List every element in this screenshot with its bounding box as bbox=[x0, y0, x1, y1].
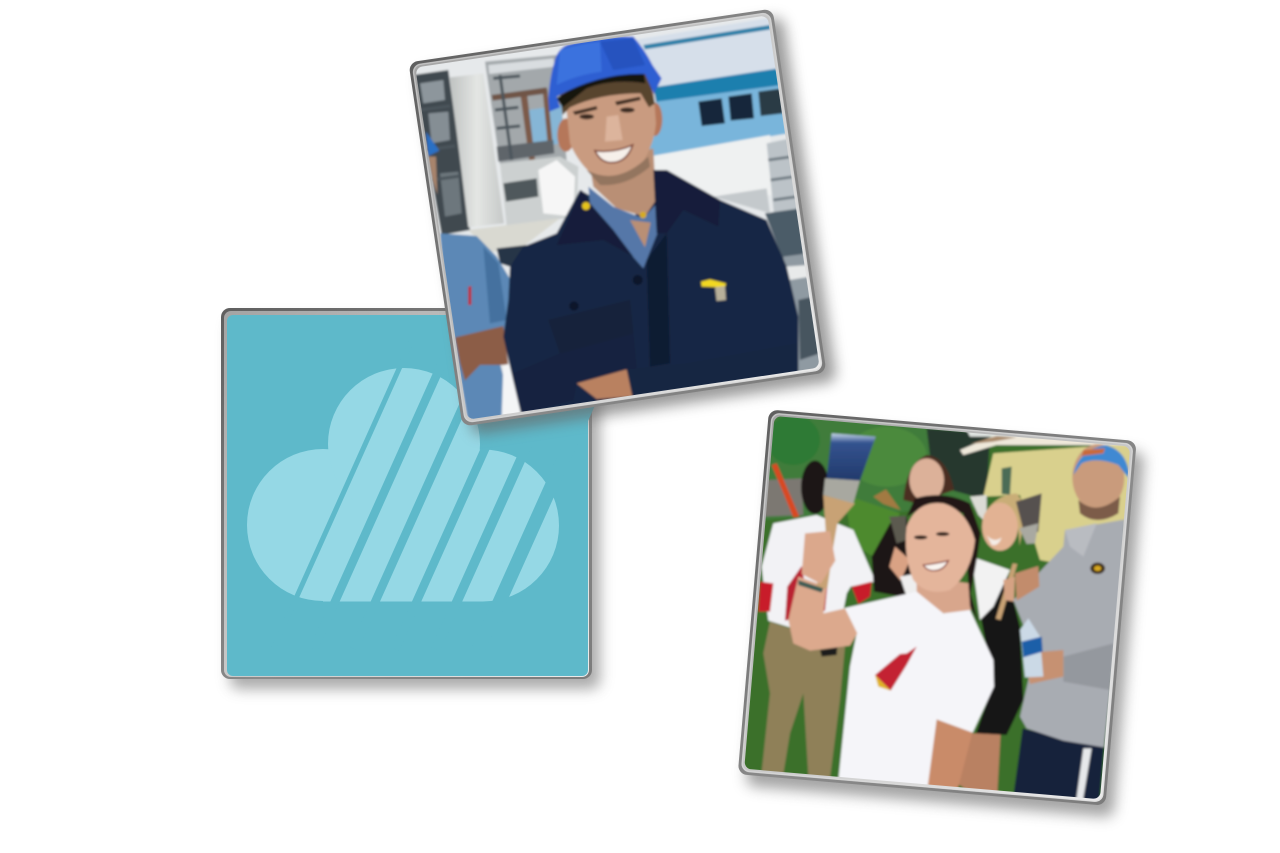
ears and head bbox=[557, 118, 575, 152]
blonde woman with brush bbox=[957, 493, 1042, 794]
foreground worker bbox=[503, 36, 798, 417]
woman behind, centre bbox=[872, 455, 954, 600]
building background bbox=[413, 17, 823, 373]
panel: worker photo card bbox=[400, 0, 840, 440]
navy jacket bbox=[503, 170, 798, 417]
yellow badge bbox=[701, 279, 726, 287]
eyes and brows bbox=[579, 114, 594, 119]
icon: striped cloud bbox=[247, 341, 616, 649]
smile bbox=[595, 145, 633, 163]
woman in front holding brush bbox=[788, 433, 994, 791]
man in grey sweater and blue cap bbox=[1013, 444, 1130, 803]
neck bbox=[590, 148, 656, 217]
black helmet band bbox=[557, 68, 645, 107]
blue shirt bbox=[587, 186, 659, 269]
panel: teal cloud card bbox=[221, 308, 616, 689]
man in background bbox=[426, 132, 523, 424]
paintbrush bbox=[816, 433, 876, 588]
panel: volunteers photo card bbox=[730, 400, 1150, 820]
trees, house and yard bbox=[760, 410, 1133, 563]
person seen from behind bbox=[758, 461, 876, 778]
crossed hand bbox=[577, 369, 632, 399]
blue hard hat bbox=[548, 36, 662, 112]
